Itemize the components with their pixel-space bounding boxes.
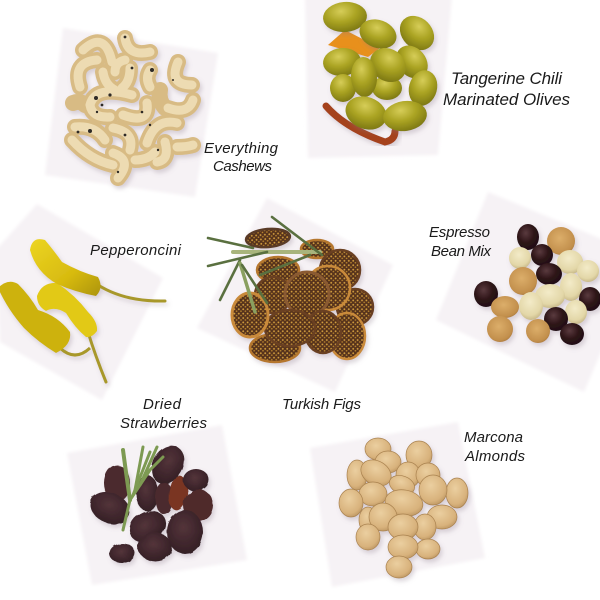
label: everything cashews: Everything <box>204 140 279 157</box>
label: turkish figs: Turkish Figs <box>282 396 362 413</box>
label: espresso bean mix: Espresso <box>429 224 490 241</box>
rosemary sprig <box>208 217 322 312</box>
chili pepper <box>326 106 395 142</box>
paper: olives <box>305 0 452 158</box>
peppers <box>0 239 165 382</box>
label: tangerine chili marinated olives: Marinated Olives <box>443 90 570 109</box>
panel: dried strawberries <box>67 425 247 585</box>
label: everything cashews: Cashews <box>213 158 272 175</box>
rosemary sprig <box>123 447 163 530</box>
panel: tangerine chili marinated olives <box>305 0 452 158</box>
panel: everything cashews <box>45 28 218 197</box>
figs <box>232 227 373 362</box>
label: marcona almonds: Almonds <box>464 448 526 465</box>
label: dried strawberries: Dried <box>143 396 182 413</box>
paper: figs <box>197 198 393 392</box>
olives <box>322 0 441 135</box>
label: tangerine chili marinated olives: Tangerine Chili <box>451 69 563 88</box>
espresso beans <box>474 224 600 345</box>
label: dried strawberries: Strawberries <box>120 415 208 432</box>
label: espresso bean mix: Bean Mix <box>431 243 492 260</box>
paper: strawberries <box>67 425 247 585</box>
almonds <box>339 438 468 578</box>
panel: marcona almonds <box>310 422 485 587</box>
panel: espresso bean mix <box>436 192 600 392</box>
paper: espresso beans <box>436 192 600 392</box>
label: marcona almonds: Marcona <box>464 429 523 446</box>
panel: turkish figs <box>197 198 393 392</box>
paper: almonds <box>310 422 485 587</box>
tangerine peel <box>328 30 380 57</box>
label: pepperoncini: Pepperoncini <box>90 242 182 259</box>
paper: cashews <box>45 28 218 197</box>
panel: pepperoncini <box>0 204 165 400</box>
cashews <box>72 36 193 178</box>
paper: pepperoncini <box>0 204 163 400</box>
dried strawberries <box>86 440 213 563</box>
